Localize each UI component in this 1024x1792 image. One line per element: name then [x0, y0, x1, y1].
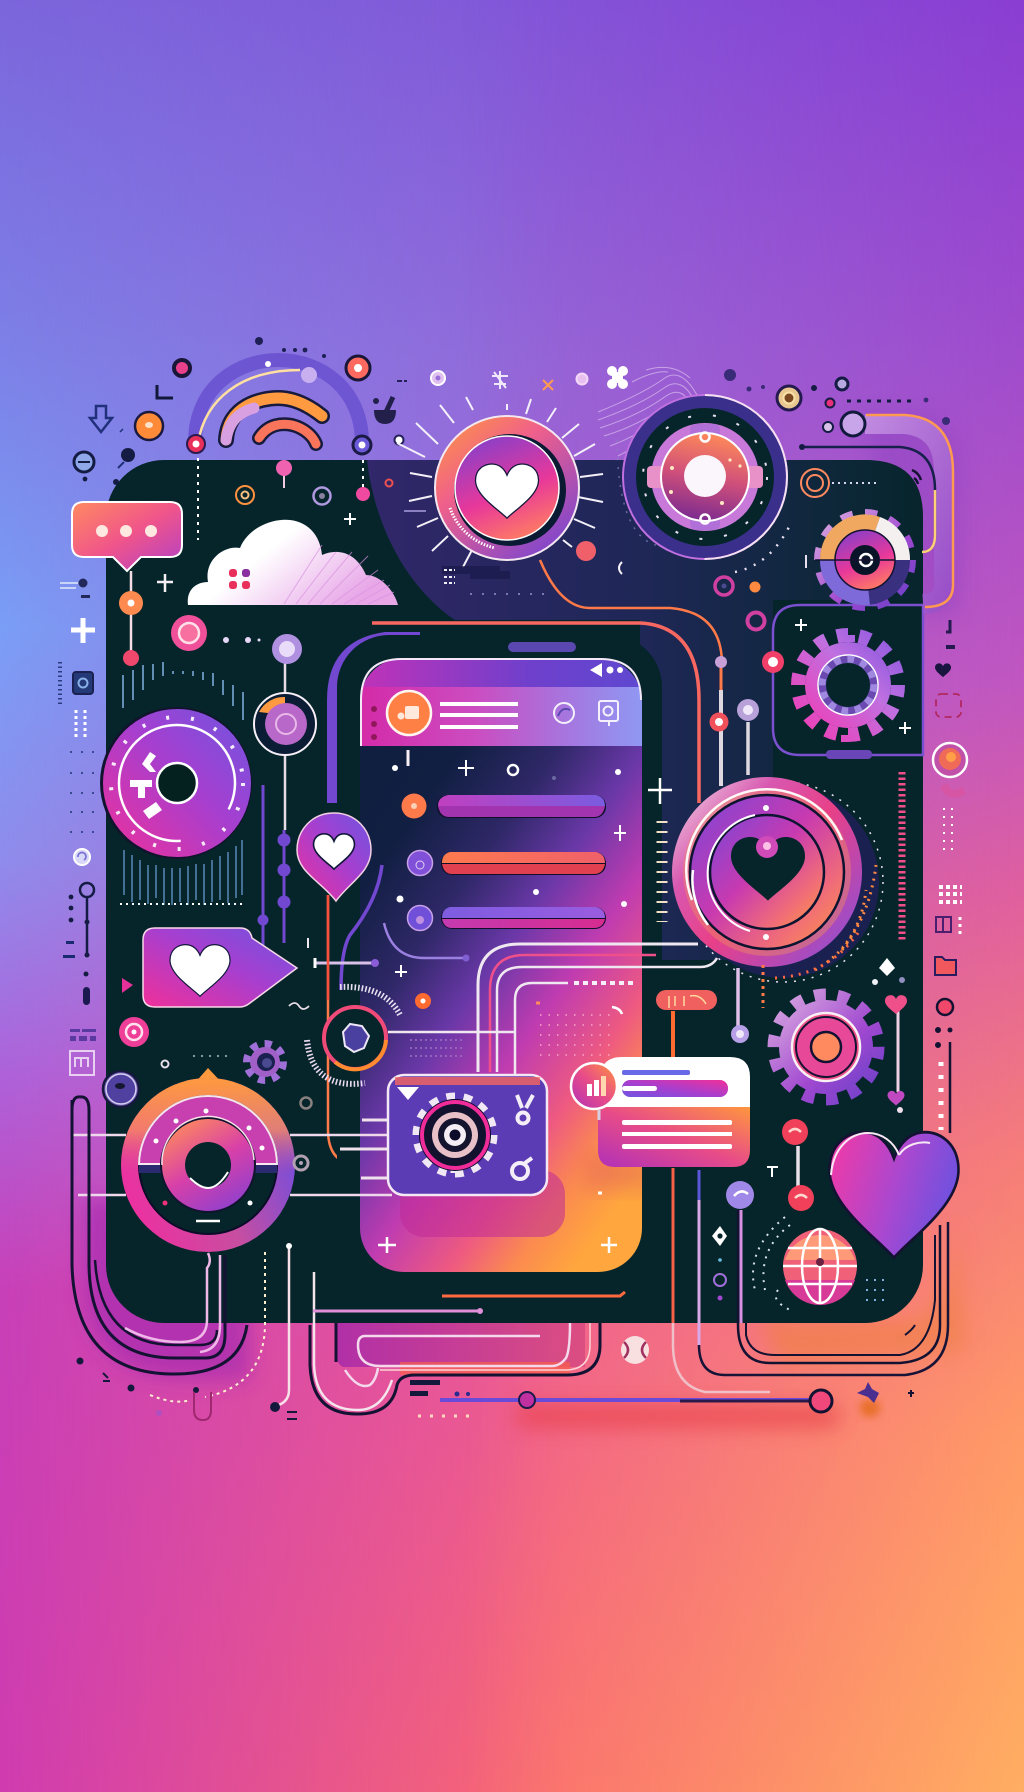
list row two — [408, 850, 606, 876]
top right dial — [617, 395, 790, 572]
radial ticks below donut — [120, 840, 242, 905]
header avatar button — [387, 691, 431, 766]
heart label arrow — [143, 928, 297, 1007]
sunburst rays — [397, 397, 603, 567]
heart pin — [297, 813, 371, 1000]
dumbbell nodes — [726, 1119, 814, 1211]
dotted arcs near globe — [753, 1217, 885, 1310]
teal small node rails — [576, 541, 784, 786]
header text lines — [440, 702, 518, 729]
coral band under the loop — [400, 1362, 570, 1375]
middle right gear — [798, 635, 898, 735]
scattered top icons — [74, 337, 950, 485]
big heart — [830, 1132, 958, 1258]
bottom slider — [440, 1390, 832, 1412]
dot patterns in screen — [410, 1003, 622, 1056]
hatch strip — [898, 772, 906, 942]
donut glyph marks — [130, 752, 162, 819]
arch small band — [259, 424, 316, 444]
header three dots — [371, 706, 377, 740]
phone body — [327, 632, 662, 1295]
left donut dial — [98, 704, 256, 862]
teal rounded gear bay — [773, 605, 923, 759]
upper right gear — [806, 514, 910, 605]
icon: tube end knob — [841, 412, 865, 436]
screen header — [360, 658, 642, 746]
card glyphs — [512, 1095, 533, 1179]
cloud — [188, 520, 398, 605]
notification badge — [571, 1063, 617, 1109]
white route lines inside phone — [72, 944, 717, 1195]
small icons near globe — [712, 1226, 727, 1300]
purple curved wires over phone — [289, 865, 470, 1009]
halo behind big ring — [683, 782, 883, 982]
notification card — [571, 1057, 750, 1167]
cloud hatch — [284, 545, 394, 604]
icon: mortar — [373, 397, 396, 424]
header status icons — [590, 663, 623, 677]
dotted orange line — [762, 965, 764, 1008]
right edge icons — [933, 620, 967, 1133]
screen sparkles — [392, 760, 672, 977]
rainbow arch icon — [187, 360, 371, 454]
header action icon square — [599, 701, 618, 726]
chat bubble — [72, 502, 182, 571]
icon: heart white — [170, 945, 230, 996]
small mark — [598, 1192, 602, 1194]
pink target button — [171, 615, 207, 651]
glass bead — [103, 1071, 139, 1107]
node lilac and ring — [254, 634, 316, 830]
decorative mesh wave — [598, 367, 697, 468]
vertical routes right of phone — [673, 1168, 948, 1392]
crosshair ring with hatch arcs — [307, 987, 400, 1084]
camera card — [388, 1075, 547, 1195]
shadow under camera card — [400, 1170, 565, 1237]
corner tick marks — [912, 470, 921, 484]
ticks left of big ring — [656, 821, 668, 922]
bottom left scatter — [76, 1358, 470, 1420]
arch inner band orange — [226, 398, 322, 440]
small ring cluster — [162, 1056, 312, 1108]
small plus — [157, 574, 173, 592]
sparkle star — [872, 958, 905, 985]
soft shadows under the panel — [85, 415, 965, 1427]
panel: navy upper zone — [367, 460, 923, 960]
pink target node — [119, 1017, 149, 1047]
dial side ring — [294, 1156, 308, 1170]
left edge icons — [60, 578, 96, 1075]
card gear — [417, 1097, 493, 1173]
globe — [783, 1229, 857, 1305]
chat connector with nodes — [119, 571, 143, 666]
ball node at bottom — [621, 1336, 649, 1364]
sunburst heart badge — [435, 416, 579, 560]
vertical rail to pin — [328, 895, 392, 1165]
small star bottom — [857, 1382, 914, 1417]
radial ticks above donut — [123, 662, 243, 720]
lower left dial — [121, 1068, 295, 1252]
pink triangle — [122, 978, 133, 993]
bottom plus marks — [378, 1237, 617, 1253]
pins under the arch — [198, 458, 392, 540]
panel: dark rounded background — [106, 460, 923, 1323]
stem with node lower — [731, 968, 749, 1043]
circuit lines top right tube — [802, 412, 953, 607]
list row one — [402, 794, 606, 818]
icon: clover — [607, 366, 628, 389]
gear bay sparkles — [795, 619, 911, 734]
orange routes above phone — [372, 560, 722, 1296]
route bottom of phone — [270, 1272, 600, 1414]
heart stem — [885, 995, 907, 1113]
orange dot in screen — [415, 993, 431, 1009]
sunburst under marks — [442, 570, 545, 594]
header action icon round — [554, 703, 574, 723]
dial upper band — [139, 1096, 277, 1173]
small purple gear — [248, 1045, 282, 1079]
lower right gear — [774, 995, 878, 1099]
red capsule — [656, 990, 717, 1060]
shadow under notification card — [585, 1155, 655, 1190]
big ring heart badge — [672, 777, 862, 967]
swirl ring — [801, 469, 880, 497]
magenta shade below the phone — [336, 1323, 585, 1367]
slider rails — [259, 785, 289, 960]
dots row — [223, 637, 260, 643]
list row three — [408, 906, 606, 930]
curved lines bottom left — [72, 1097, 292, 1407]
phone screen — [360, 658, 672, 1272]
